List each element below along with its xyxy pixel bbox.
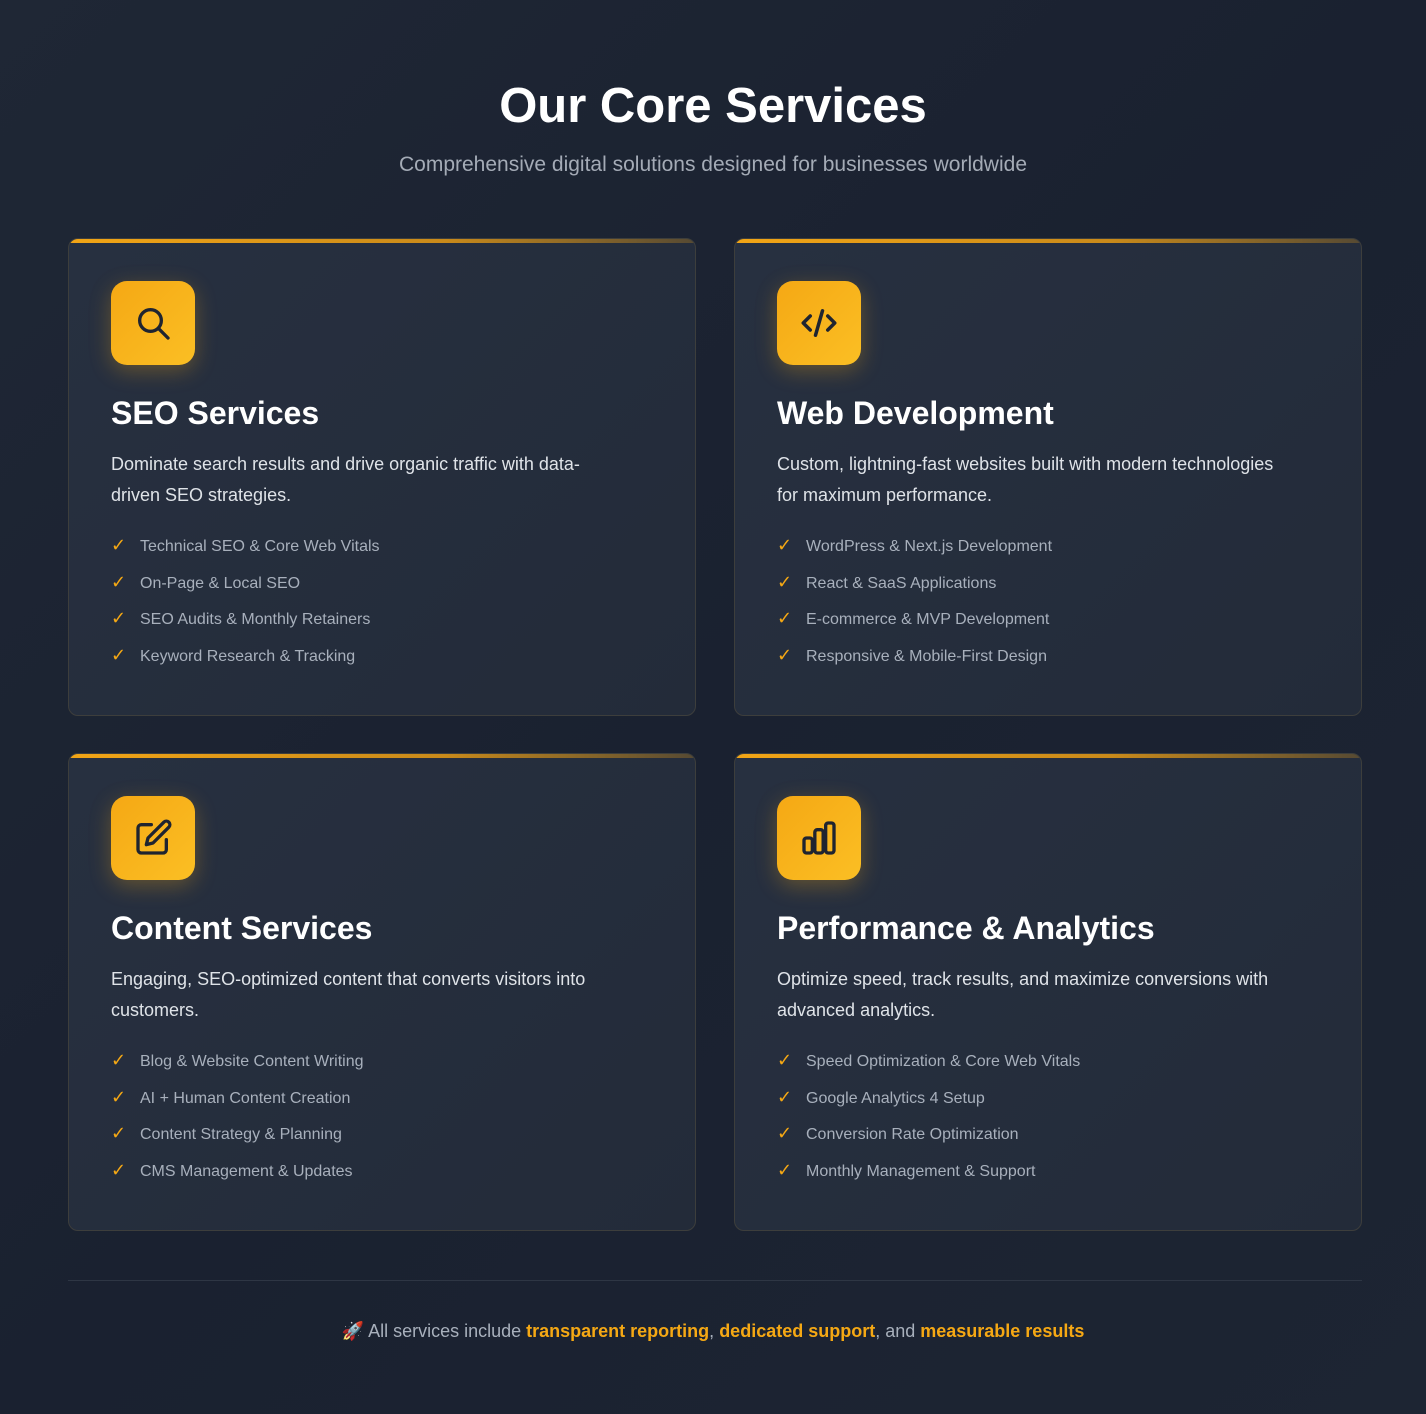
feature list: Keyword Research & Tracking (140, 648, 355, 664)
panel: Web Development (734, 238, 1362, 716)
feature list: ✓ (777, 1086, 792, 1106)
heading: Web Development (777, 395, 1054, 431)
heading: SEO Services (111, 395, 319, 431)
feature list (111, 535, 380, 664)
feature list: WordPress & Next.js Development (806, 538, 1052, 555)
panel: Performance & Analytics (734, 753, 1362, 1231)
subtitle: Comprehensive digital solutions designed for businesses worldwide (399, 153, 1027, 176)
feature list: ✓ (111, 572, 126, 592)
icon: edit (111, 796, 195, 880)
feature list: ✓ (777, 572, 792, 592)
feature list (777, 535, 1052, 664)
feature list: AI + Human Content Creation (140, 1090, 350, 1106)
description: Custom, lightning-fast websites built with modern technologies for maximum performance. (777, 454, 1273, 505)
feature list (777, 1050, 1080, 1180)
feature list: ✓ (111, 1050, 126, 1070)
feature list: ✓ (111, 1123, 126, 1143)
feature list: ✓ (111, 1086, 126, 1106)
description: Dominate search results and drive organic traffic with data-driven SEO strategies. (111, 454, 580, 505)
feature list: ✓ (777, 1160, 792, 1180)
feature list: E-commerce & MVP Development (806, 611, 1049, 628)
feature list: Content Strategy & Planning (140, 1126, 342, 1143)
feature list: Responsive & Mobile-First Design (806, 648, 1047, 664)
feature list: Monthly Management & Support (806, 1162, 1035, 1180)
feature list: ✓ (777, 1050, 792, 1070)
panel: Content Services (68, 753, 696, 1231)
feature list: ✓ (111, 1160, 126, 1180)
feature list: CMS Management & Updates (140, 1162, 353, 1180)
description: Optimize speed, track results, and maximize conversions with advanced analytics. (777, 969, 1268, 1020)
feature list: Conversion Rate Optimization (806, 1126, 1019, 1143)
feature list: Blog & Website Content Writing (140, 1053, 364, 1070)
icon: bar chart (777, 796, 861, 880)
feature list: ✓ (111, 644, 126, 664)
feature list (111, 1050, 364, 1180)
feature list: ✓ (111, 608, 126, 628)
heading: Performance & Analytics (777, 910, 1155, 946)
feature list: Speed Optimization & Core Web Vitals (806, 1053, 1080, 1070)
feature list: ✓ (111, 535, 126, 555)
panel: SEO Services (68, 238, 696, 716)
feature list: ✓ (777, 644, 792, 664)
icon: code (777, 281, 861, 365)
feature list: SEO Audits & Monthly Retainers (140, 611, 370, 628)
feature list: Technical SEO & Core Web Vitals (140, 538, 380, 555)
feature list: Google Analytics 4 Setup (806, 1090, 985, 1106)
icon: search (111, 281, 195, 365)
feature list: ✓ (777, 535, 792, 555)
description: Engaging, SEO-optimized content that converts visitors into customers. (111, 969, 585, 1020)
heading: Content Services (111, 910, 372, 946)
title: Our Core Services (499, 79, 927, 133)
footer note: 🚀 All services include transparent reporting, dedicated support, and measurable results (342, 1321, 1084, 1341)
feature list: On-Page & Local SEO (140, 574, 300, 592)
feature list: ✓ (777, 1123, 792, 1143)
feature list: React & SaaS Applications (806, 574, 996, 592)
feature list: ✓ (777, 608, 792, 628)
